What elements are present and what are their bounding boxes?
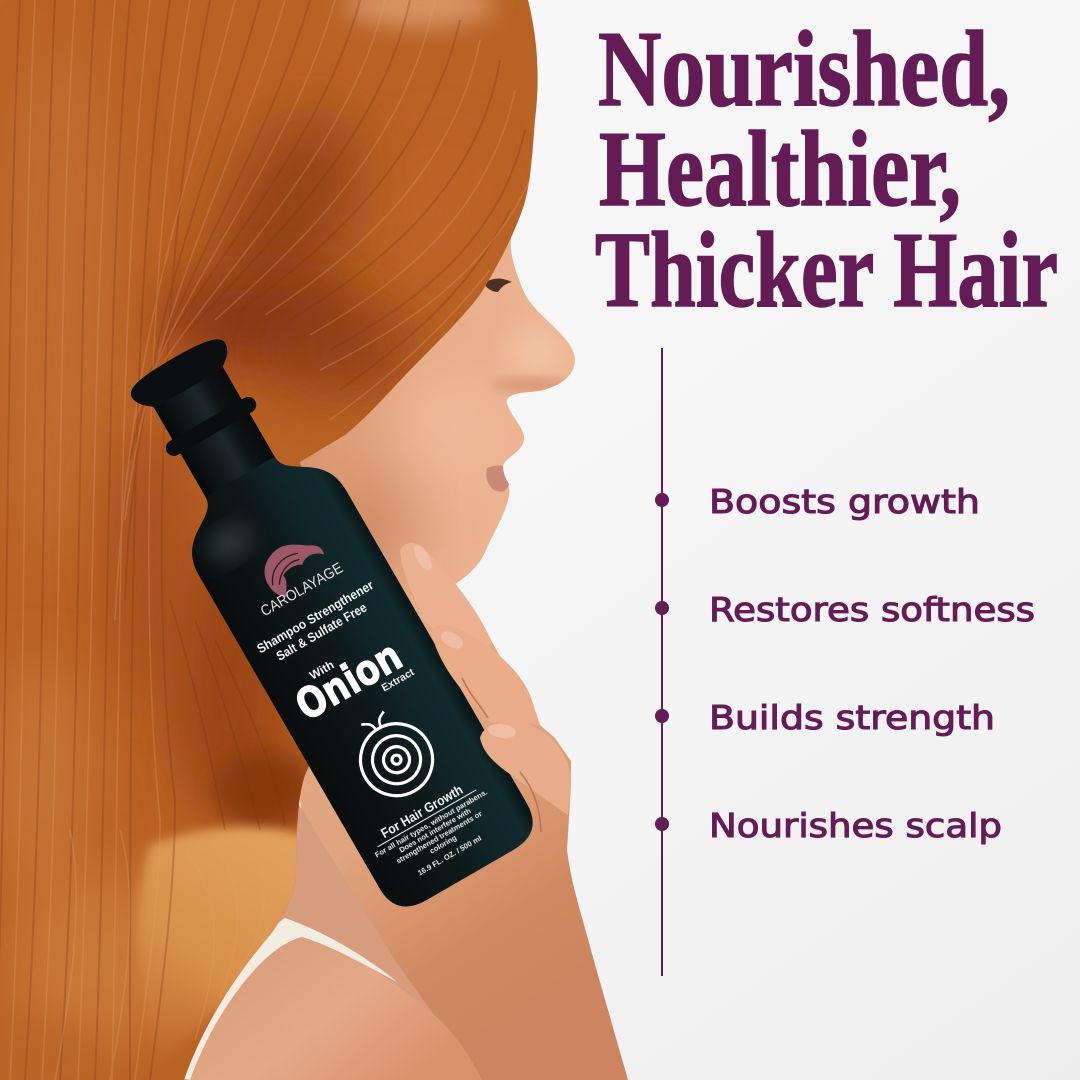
benefit: builds strength: Builds strength: [709, 698, 995, 737]
product bottle: [98, 316, 544, 917]
title: [595, 10, 1058, 330]
vertical timeline rule: [661, 348, 663, 976]
for hair growth label: For Hair Growth: [378, 782, 465, 841]
brand name: CAROLAYAGE: [258, 559, 346, 620]
bottle cap lip: [125, 332, 236, 415]
bottle shape: [98, 316, 544, 917]
fingernails: [411, 543, 517, 740]
title: Healthier,: [599, 110, 961, 229]
product name: Extract: [380, 666, 417, 694]
arm and hand silhouette: [300, 470, 628, 1080]
face profile: [300, 175, 575, 584]
small print: Does not interfere with: [398, 806, 473, 855]
shoulder highlight: [204, 520, 256, 566]
label rule: [378, 790, 476, 847]
shoulder: [186, 937, 482, 1080]
bottle label: [218, 517, 512, 892]
face shading: [330, 330, 570, 590]
finger 1: [400, 543, 492, 676]
product name: With: [307, 658, 336, 683]
hair tonal shading: [0, 0, 530, 1080]
product name: Shampoo Strengthener: [254, 577, 376, 656]
product name: [254, 577, 424, 738]
small print: strengthened treatments or: [395, 809, 484, 866]
benefit: restores softness: Restores softness: [709, 590, 1035, 629]
finger 3: [480, 723, 571, 815]
bottle body: [166, 434, 544, 918]
brand logo: [255, 530, 334, 602]
benefit: nourishes scalp: Nourishes scalp: [709, 806, 1002, 845]
eye: [484, 278, 512, 292]
bottle neck: [143, 348, 287, 518]
finger 2: [431, 625, 540, 725]
product name: Onion: [287, 631, 410, 730]
lips: [486, 465, 509, 492]
finger creases: [462, 678, 541, 832]
benefit: boosts growth: Boosts growth: [709, 482, 980, 521]
long red hair: [0, 0, 538, 1080]
small print: For all hair types, without parabens.: [373, 787, 489, 859]
neck and shoulder: [182, 800, 482, 1080]
small print: 16.9 FL. OZ. / 500 ml: [416, 834, 483, 877]
small print: [373, 787, 507, 892]
small print: coloring: [428, 833, 458, 856]
neck collar: [163, 394, 259, 459]
garment strap: [182, 918, 397, 1080]
onion icon: [341, 700, 446, 809]
product name: Salt & Sulfate Free: [274, 600, 369, 664]
fingers: [400, 543, 571, 832]
